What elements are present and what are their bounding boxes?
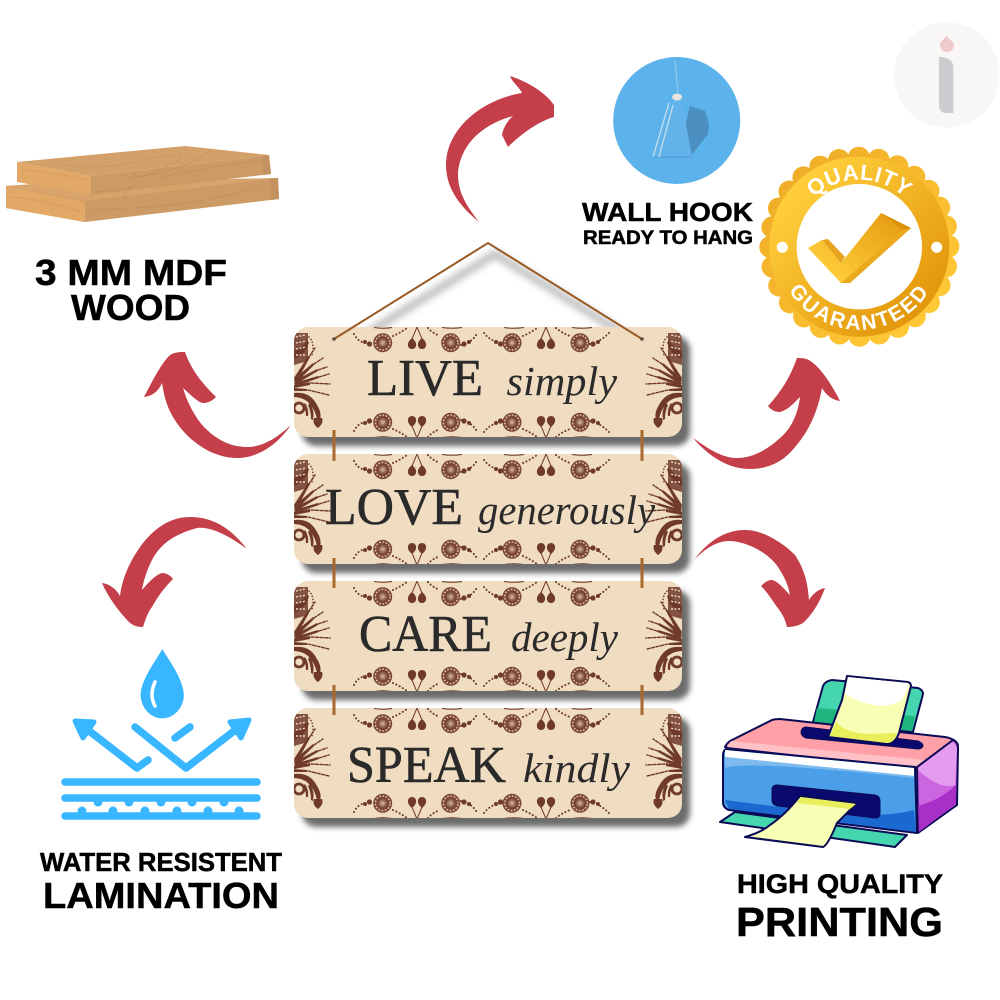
- heading: wall hook ready to hang: READY TO HANG: [583, 228, 753, 249]
- plaque: speak kindly: kindly: [523, 745, 631, 791]
- plaque: live simply: [294, 327, 682, 438]
- plaque: love generously: [294, 454, 682, 565]
- heading: high quality printing: HIGH QUALITY: [737, 869, 943, 899]
- plaque: love generously: LOVE: [325, 479, 463, 536]
- plaque: care deeply: CARE: [359, 606, 492, 663]
- plaque: love generously: generously: [478, 487, 656, 533]
- plaque: speak kindly: [294, 708, 682, 819]
- plaque: live simply: simply: [506, 358, 618, 404]
- icon: blue wall hook: [613, 57, 740, 184]
- icon: water resistant droplet and layers: [65, 649, 257, 816]
- heading: high quality printing: [736, 869, 943, 945]
- heading: water resistent lamination: [40, 847, 282, 916]
- badge: quality guaranteed: GUARANTEED: [791, 285, 926, 330]
- plaque: speak kindly: SPEAK: [347, 737, 506, 794]
- heading: 3 mm MDF wood: 3 MM MDF: [35, 252, 227, 293]
- plaque: care deeply: [294, 581, 682, 692]
- plaque: live simply: LIVE: [367, 350, 483, 407]
- heading: high quality printing: PRINTING: [736, 899, 943, 945]
- heading: 3 mm MDF wood: [35, 252, 227, 328]
- heading: wall hook ready to hang: WALL HOOK: [582, 197, 753, 227]
- arrow: to wood: [144, 352, 291, 458]
- arrow: to printer: [694, 530, 825, 627]
- arrow: to lamination: [102, 517, 247, 627]
- arrow: to wall hook: [446, 76, 554, 222]
- icon: printer: [720, 676, 958, 847]
- icon: check mark: [808, 213, 911, 283]
- arrow: to quality badge: [693, 358, 840, 469]
- heading: water resistent lamination: LAMINATION: [43, 875, 279, 916]
- badge: quality guaranteed: [759, 146, 960, 347]
- connecting strings: [334, 430, 642, 715]
- plaque shadows: [302, 336, 690, 827]
- hanging rope: [332, 243, 644, 341]
- icon: stacked wood planks: [6, 146, 279, 222]
- hanging rope shadow: [342, 254, 648, 349]
- logo: i badge: [894, 22, 999, 128]
- heading: 3 mm MDF wood: WOOD: [71, 287, 190, 328]
- heading: wall hook ready to hang: [582, 197, 753, 249]
- plaque: care deeply: deeply: [511, 614, 619, 660]
- heading: water resistent lamination: WATER RESISTENT: [40, 847, 282, 877]
- badge: quality guaranteed: QUALITY: [808, 164, 914, 194]
